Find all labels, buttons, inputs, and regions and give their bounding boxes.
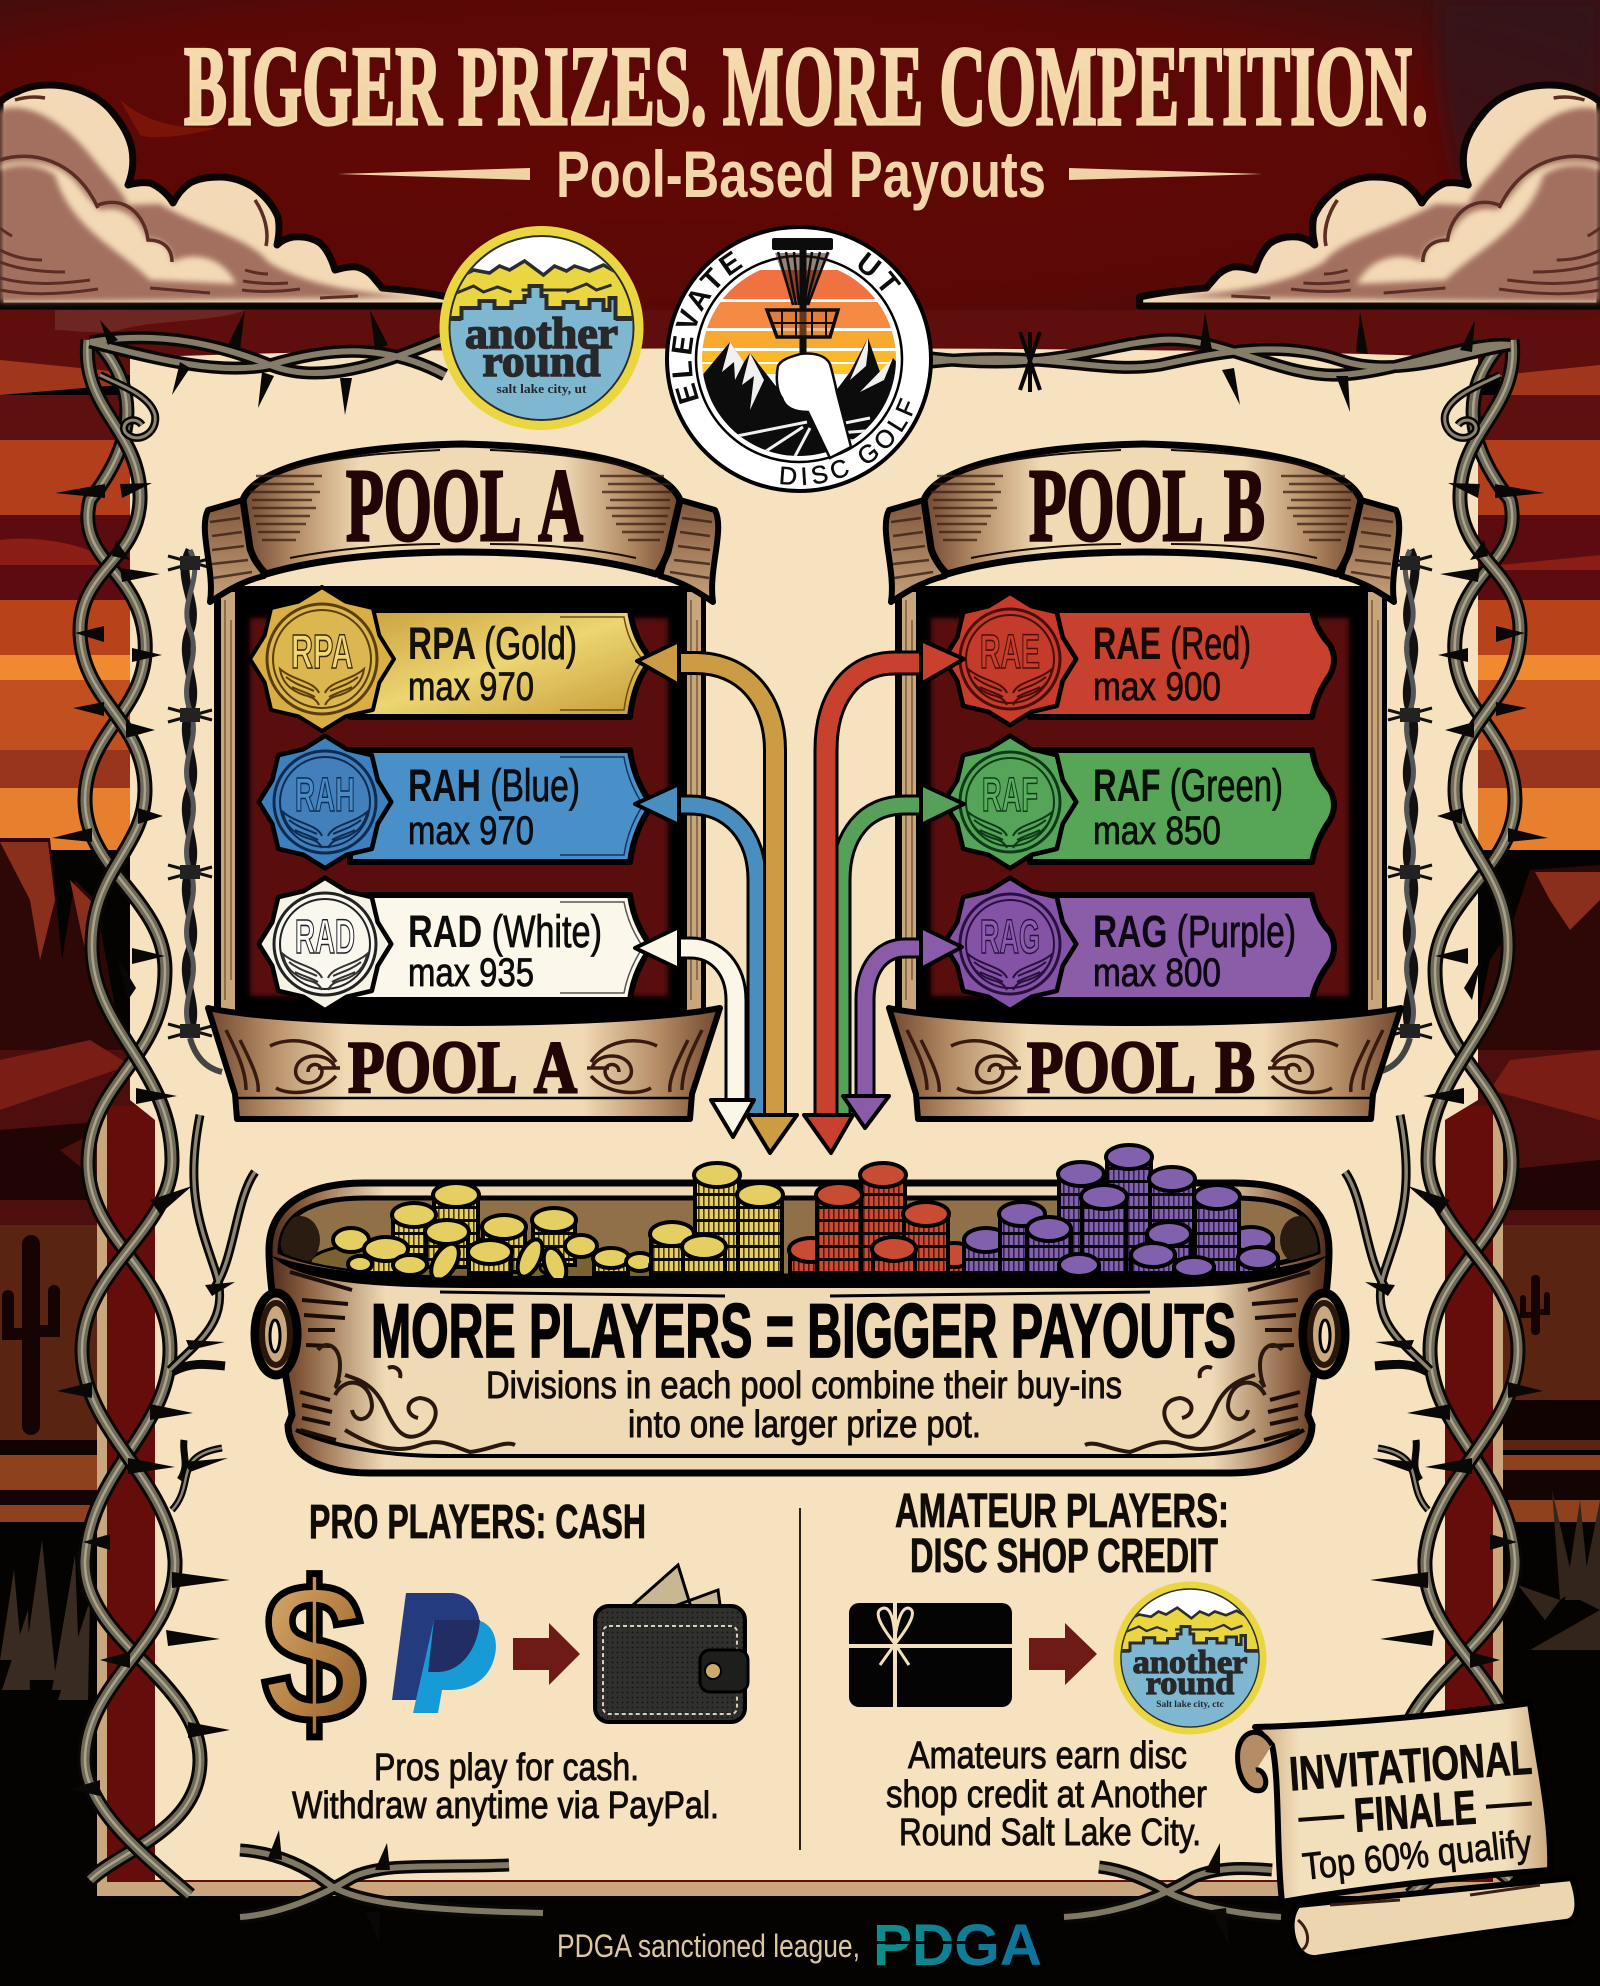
scroll subheading (1297, 1778, 1534, 1847)
pot ornament left (318, 1345, 515, 1452)
arrow: green (841, 784, 964, 1115)
logo lettering: UT (858, 252, 902, 291)
icon: cactus left (2, 1235, 60, 1435)
row: RAG purple: RAG (980, 911, 1040, 964)
amateur heading (895, 1485, 1229, 1583)
row: RAF green: RAF (982, 769, 1038, 822)
pot hatch shading (290, 1272, 1310, 1440)
row: RAE red: RAE (980, 626, 1040, 679)
arrow: amateur (1029, 1623, 1097, 1685)
pot description: into one larger prize pot. (628, 1404, 981, 1446)
pro description: Withdraw anytime via PayPal. (292, 1785, 719, 1827)
row: RAD white: RAD (White) (408, 906, 602, 957)
logo: another round small: round (1146, 1666, 1234, 1702)
arrow: blue (635, 784, 757, 1115)
amateur description: Round Salt Lake City. (899, 1812, 1201, 1854)
row: RAE red: max 900 (1093, 665, 1221, 709)
pot body (269, 1183, 1329, 1473)
icon: paypal (392, 1593, 496, 1713)
subtitle: Pool-Based Payouts (556, 137, 1046, 211)
coins: purple (964, 1145, 1278, 1277)
thorn vine frame right (1345, 340, 1548, 1895)
logo: another round (440, 226, 644, 430)
coins: gold (280, 1216, 1318, 1276)
amateur heading: AMATEUR PLAYERS: (895, 1485, 1229, 1538)
logo: elevate ut disc golf (665, 225, 933, 493)
pro description (292, 1747, 719, 1827)
barbed wire top (90, 310, 1510, 415)
logo: another round small: another (1133, 1645, 1247, 1681)
logo: PDGA: PDGA (873, 1913, 1042, 1978)
scroll qualify text: Top 60% qualify (1301, 1823, 1534, 1889)
row: RAG purple (944, 878, 1334, 1010)
panel: pool B (886, 444, 1401, 1119)
arrow: pro (513, 1623, 580, 1685)
section divider (799, 1508, 801, 1850)
arrow: red (804, 640, 964, 1153)
pool B heading: POOL B (1029, 448, 1265, 563)
section: pro players (262, 1496, 748, 1827)
pool A frame (205, 444, 720, 1119)
pool B frame (886, 444, 1401, 1119)
row: RAF green (944, 736, 1334, 868)
thorn vine frame left (52, 340, 255, 1895)
row: RPA gold: RPA (291, 626, 353, 679)
icon: cactus right (1520, 1275, 1550, 1335)
section: amateur players (849, 1485, 1266, 1854)
scroll: invitational finale (1238, 1703, 1577, 1958)
subtitle (337, 137, 1263, 211)
pool A footer label: POOL A (348, 1027, 577, 1109)
prize pot (255, 1145, 1345, 1473)
pool A heading: POOL A (346, 448, 583, 563)
logo: another round: round (483, 337, 600, 386)
row: RAH blue (259, 736, 652, 868)
logo: another round: salt lake city, ut (496, 381, 587, 396)
amateur heading: DISC SHOP CREDIT (910, 1530, 1218, 1583)
row: RAE red (944, 593, 1334, 725)
icon: raised fist (777, 353, 851, 458)
scroll subheading: FINALE (1352, 1782, 1478, 1843)
row: RAH blue: RAH (295, 769, 355, 822)
pot handle left (255, 1293, 297, 1375)
pot rim front (272, 1256, 1326, 1288)
row: RPA gold: max 970 (408, 665, 534, 709)
arrow: purple (843, 927, 962, 1128)
amateur description (886, 1735, 1207, 1854)
cloud left (0, 85, 447, 306)
icon: disc golf basket (767, 238, 838, 354)
pot interior (280, 1198, 1318, 1276)
logo lettering (672, 250, 913, 486)
icon: wallet (595, 1565, 748, 1722)
logo: another round: another (465, 309, 618, 358)
barbed wire beside pool B (1378, 550, 1432, 1072)
row: RAG purple: RAG (Purple) (1093, 906, 1296, 957)
coins: red (789, 1163, 976, 1275)
parchment panel (97, 348, 1503, 1896)
pot description: Divisions in each pool combine their buy-ins (486, 1365, 1122, 1407)
cloud right (1140, 85, 1600, 306)
icon: dollar sign: $ (262, 1542, 366, 1765)
row: RPA gold: RPA (Gold) (408, 618, 577, 669)
row: RAD white: RAD (295, 911, 355, 964)
pro heading: PRO PLAYERS: CASH (309, 1496, 646, 1549)
row: RAH blue: max 970 (408, 809, 534, 853)
bottom thorns (240, 1830, 1281, 1945)
footer text: PDGA sanctioned league, (557, 1928, 860, 1964)
pot handle right (1303, 1293, 1345, 1375)
arrow: gold (637, 641, 797, 1153)
top maroon header band (0, 0, 1600, 332)
row: RAH blue: RAH (Blue) (408, 760, 580, 811)
icon: agave left (0, 1540, 90, 1700)
row: RPA gold (250, 587, 652, 731)
icon: gift card (849, 1603, 1012, 1707)
row: RAF green: max 850 (1093, 809, 1221, 853)
row: RAE red: RAE (Red) (1093, 618, 1251, 669)
pot description (486, 1365, 1122, 1446)
row: RAG purple: max 800 (1093, 951, 1221, 995)
logo lettering: DISC GOLF (780, 398, 913, 486)
barbed wire beside pool A (168, 550, 222, 1072)
logo: another round small: Salt lake city, ctc (1156, 1699, 1224, 1710)
logo: another round small (1114, 1582, 1266, 1734)
pot ornament right (1085, 1345, 1282, 1452)
arrow: white (635, 927, 754, 1137)
row: RAD white (259, 878, 652, 1010)
pool B footer label: POOL B (1027, 1027, 1255, 1109)
icon: agave right (1518, 1490, 1600, 1650)
logo lettering: ELEVATE (672, 250, 743, 404)
row: RAD white: max 935 (408, 951, 534, 995)
amateur description: shop credit at Another (886, 1774, 1207, 1816)
pro description: Pros play for cash. (374, 1747, 639, 1789)
row: RAF green: RAF (Green) (1093, 760, 1283, 811)
amateur description: Amateurs earn disc (908, 1735, 1187, 1777)
panel: pool A (205, 444, 720, 1119)
